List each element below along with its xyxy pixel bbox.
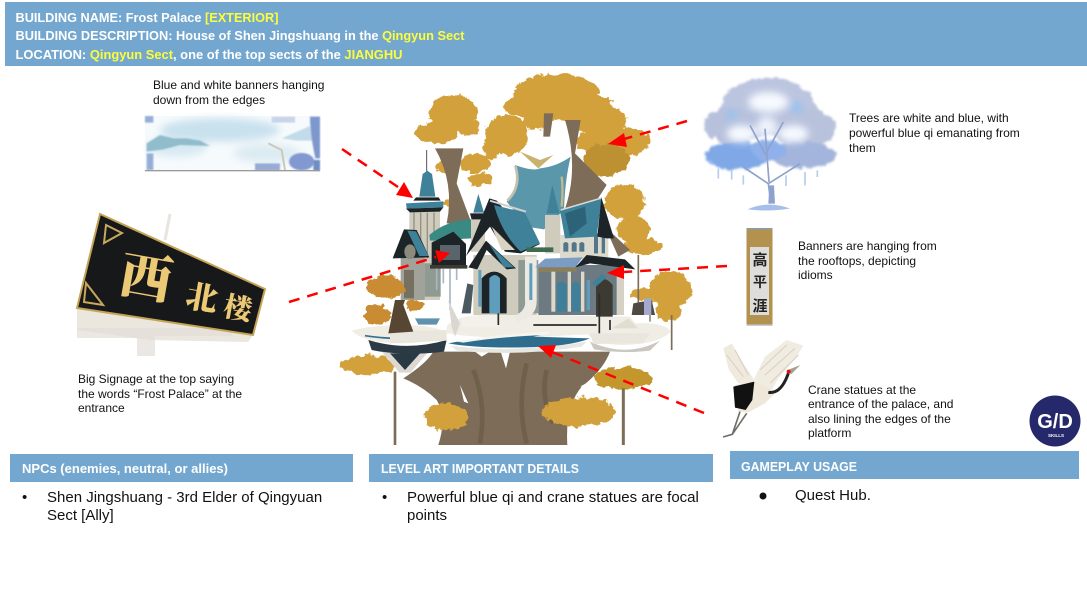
annotation: hanging banners: Banners are hanging from — [798, 239, 937, 253]
image: signboard: 西 — [115, 232, 179, 315]
annotation: big signage: the words “Frost Palace” at the — [78, 387, 242, 401]
annotation: big signage — [78, 372, 242, 415]
annotation: trees — [849, 111, 1020, 155]
panel: level art important details: LEVEL ART IMPORTANT DETAILS — [381, 461, 579, 476]
image: hanging scroll: 高 — [752, 249, 768, 270]
image: flying crane — [723, 340, 803, 437]
panel: NPCs: Sect [Ally] — [47, 507, 114, 524]
image: signboard: 楼 — [221, 285, 258, 330]
header banner: BUILDING NAME: Frost Palace [EXTERIOR] — [16, 10, 278, 25]
panel: NPCs — [10, 454, 353, 524]
logo: G/D — [1037, 411, 1073, 433]
annotation: blue and white banners — [153, 78, 324, 107]
main teal roofs — [466, 197, 614, 269]
annotation: crane statues — [808, 383, 953, 440]
main walls — [473, 233, 624, 322]
annotation: trees: Trees are white and blue, with — [849, 111, 1009, 125]
panel: level art important details: points — [407, 507, 447, 524]
panel: gameplay usage: GAMEPLAY USAGE — [741, 459, 857, 474]
floating platform — [352, 323, 671, 373]
image: hanging scroll: 平 — [753, 272, 767, 292]
annotation: trees: them — [849, 141, 876, 155]
palace building — [390, 150, 650, 353]
west wing — [393, 219, 473, 313]
header banner — [5, 2, 1087, 66]
header banner: BUILDING DESCRIPTION: House of Shen Jingshuang in the Qingyun Sect — [16, 28, 465, 43]
porch roof — [535, 255, 635, 272]
annotation: big signage: entrance — [78, 401, 125, 415]
panel: NPCs: Shen Jingshuang - 3rd Elder of Qingyuan — [47, 489, 322, 506]
golden tree canopies — [340, 74, 692, 430]
arrow: rooftop banners — [607, 265, 727, 279]
image: signboard: 北 — [182, 271, 222, 321]
back curved roof — [470, 152, 571, 253]
paved terrace — [447, 314, 643, 338]
annotation: crane statues: also lining the edges of the — [808, 412, 951, 426]
annotation: hanging banners — [798, 239, 937, 282]
doors and arched windows — [478, 270, 613, 317]
logo — [1030, 396, 1080, 446]
upper tree trunks — [435, 113, 630, 257]
steps, railing and lamp post — [415, 293, 638, 337]
annotation: crane statues: entrance of the palace, and — [808, 397, 953, 411]
image: hanging scroll: 涯 — [752, 295, 768, 316]
image: white and blue qi tree — [704, 78, 837, 211]
annotation: trees: powerful blue qi emanating from — [849, 126, 1020, 140]
panel: NPCs: • — [22, 489, 27, 506]
arrow: banners — [342, 149, 413, 198]
panel: level art important details: • — [382, 489, 387, 506]
slim tree stems — [395, 255, 672, 445]
panel: gameplay usage — [730, 451, 1079, 504]
image: signboard — [77, 214, 265, 356]
panel: level art important details — [369, 454, 713, 524]
annotation: crane statues: Crane statues at the — [808, 383, 916, 397]
header banner: LOCATION: Qingyun Sect, one of the top sects of the JIANGHU — [16, 47, 402, 62]
panel: NPCs: NPCs (enemies, neutral, or allies) — [22, 461, 228, 476]
giant tree trunk — [403, 352, 627, 445]
image: blue and white landscape banner — [145, 116, 320, 171]
annotation: big signage: Big Signage at the top saying — [78, 372, 234, 386]
arrow: trees — [608, 121, 687, 147]
arrow: signage — [289, 250, 450, 302]
annotation: hanging banners: idioms — [798, 268, 833, 282]
annotation: hanging banners: the rooftops, depicting — [798, 254, 916, 268]
panel: gameplay usage: Quest Hub. — [795, 487, 871, 504]
image: palace on giant tree — [340, 74, 692, 445]
panel: level art important details: Powerful blue qi and crane statues are focal — [407, 489, 699, 506]
blue pool basin — [390, 330, 650, 353]
annotation: crane statues: platform — [808, 426, 851, 440]
bonsai tree on platform — [363, 275, 424, 333]
tower with spire — [406, 150, 443, 300]
logo: SKILLS — [1048, 433, 1064, 438]
annotation: blue and white banners: down from the edges — [153, 93, 265, 107]
image: hanging scroll — [746, 229, 772, 325]
arrow: crane statues — [538, 345, 704, 413]
annotation: blue and white banners: Blue and white banners hanging — [153, 78, 324, 92]
